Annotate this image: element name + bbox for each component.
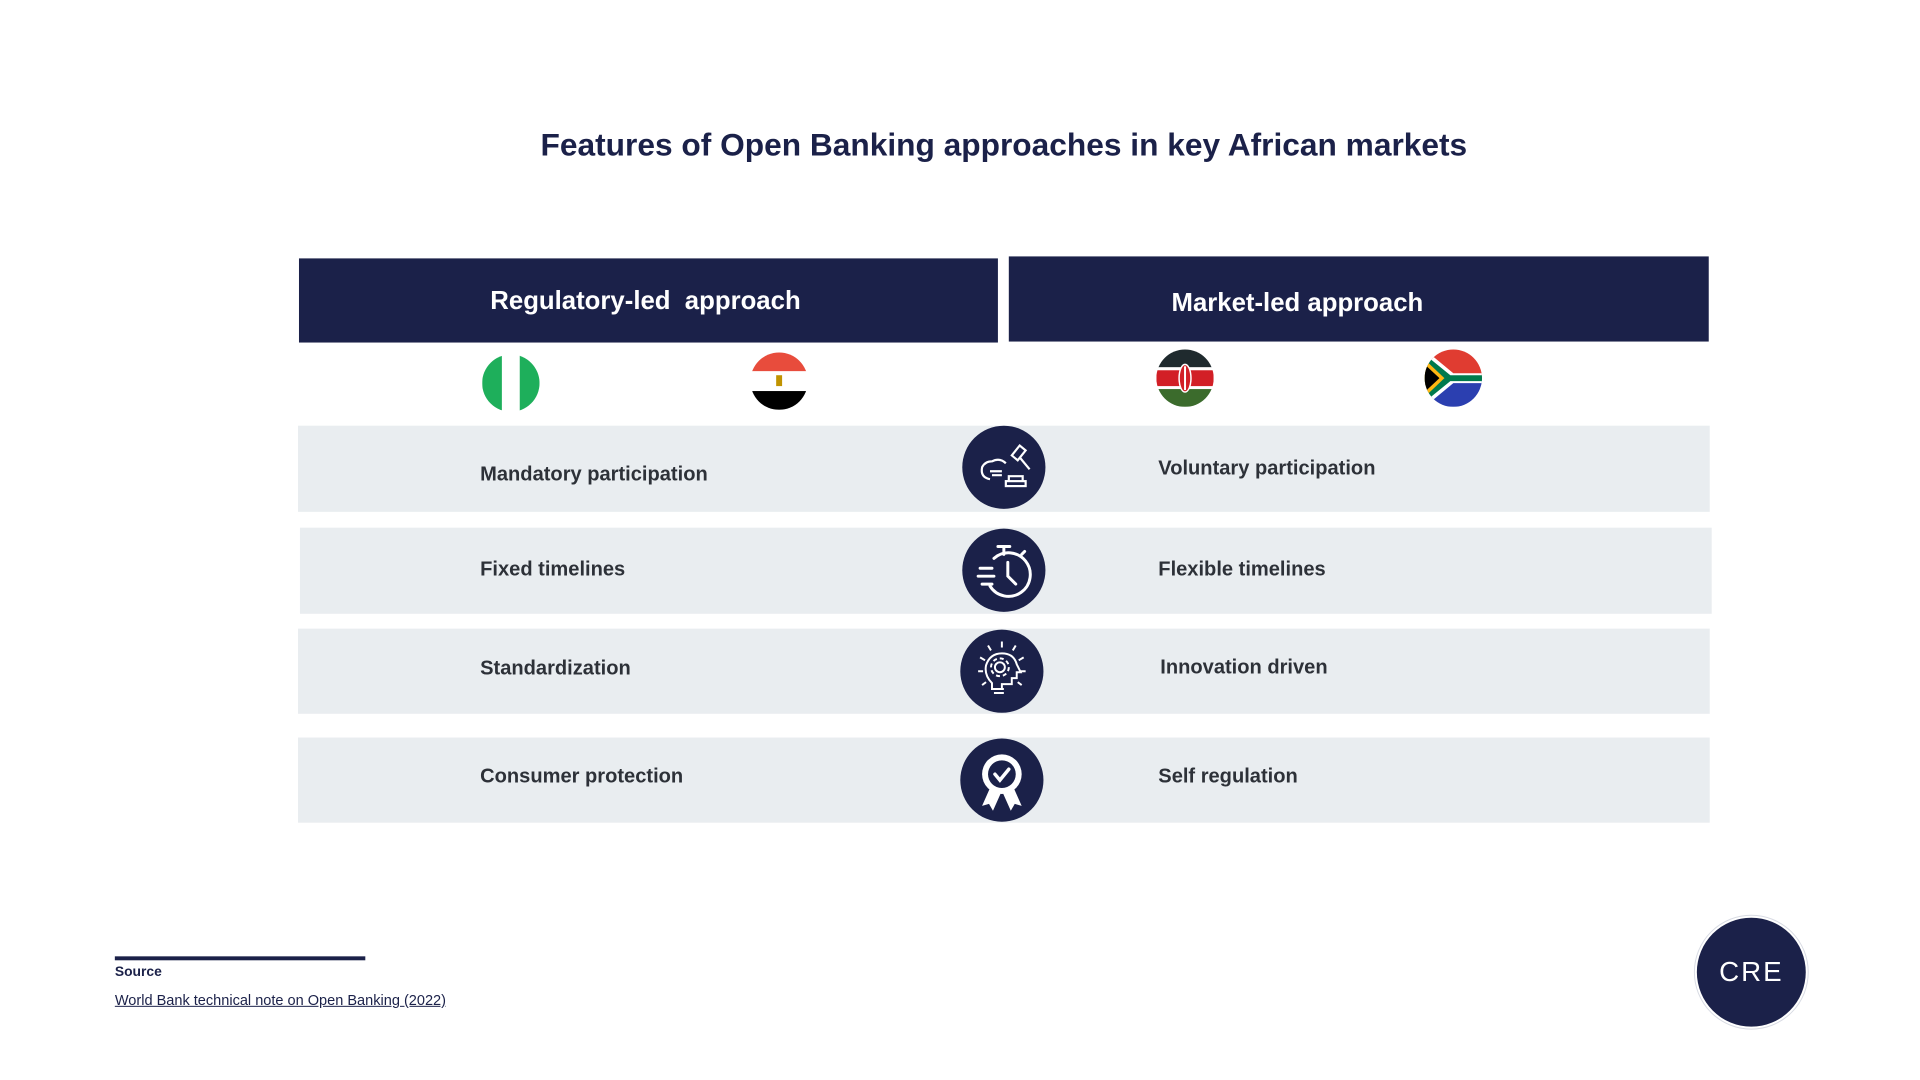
text: consumer protection: Consumer protection <box>480 766 683 788</box>
logo: CRE <box>1694 915 1809 1030</box>
header: regulatory-led <box>299 258 998 343</box>
text: innovation driven: Innovation driven <box>1160 657 1328 679</box>
source block <box>114 956 446 1009</box>
row 1 <box>298 426 1710 512</box>
text: mandatory participation: Mandatory participation <box>480 464 708 486</box>
row 3 <box>298 629 1710 714</box>
icon: stopwatch <box>962 529 1045 612</box>
flag: Egypt <box>752 352 806 410</box>
text: fixed timelines: Fixed timelines <box>480 559 625 581</box>
flag: Kenya <box>1156 350 1214 407</box>
title: Features of Open Banking approaches in key African markets <box>541 127 1467 162</box>
row 4 <box>298 738 1710 823</box>
text: standardization: Standardization <box>480 658 631 680</box>
header: regulatory-led: Regulatory-led approach <box>490 285 801 315</box>
header: market-led <box>1009 256 1709 342</box>
flag: Nigeria <box>482 356 540 410</box>
flag: South Africa <box>1424 350 1482 407</box>
text: self regulation: Self regulation <box>1158 766 1298 788</box>
source block: World Bank technical note on Open Banking (2022) <box>115 993 446 1009</box>
row 2 <box>300 528 1712 614</box>
source block: Source <box>115 963 162 979</box>
header: market-led: Market-led approach <box>1172 287 1423 316</box>
text: voluntary participation: Voluntary participation <box>1158 458 1375 480</box>
icon: award ribbon <box>960 739 1043 822</box>
icon: gavel <box>962 426 1045 509</box>
icon: lightbulb with gear <box>960 630 1043 713</box>
text: flexible timelines: Flexible timelines <box>1158 559 1326 581</box>
logo: CRE: CRE <box>1719 956 1784 987</box>
